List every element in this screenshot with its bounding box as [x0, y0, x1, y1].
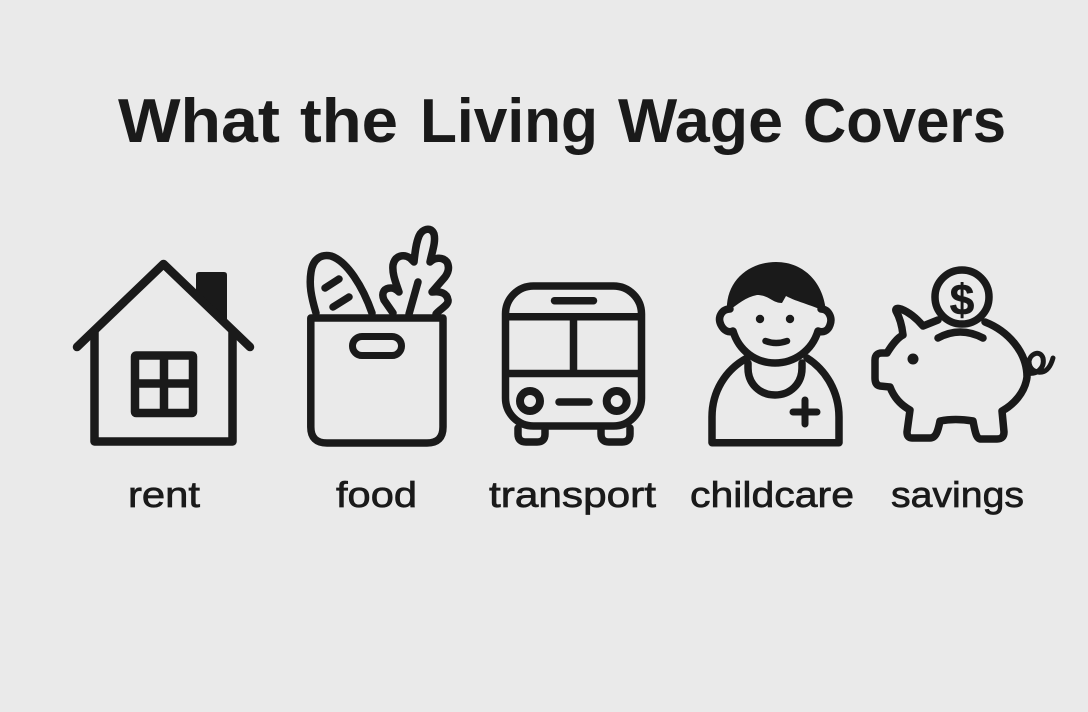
left eye	[756, 315, 764, 323]
plus badge	[793, 400, 817, 424]
label: rent: rent	[128, 474, 200, 515]
right eye	[786, 315, 794, 323]
right wheel	[601, 428, 630, 442]
title: the	[300, 87, 398, 156]
right headlight	[607, 391, 627, 411]
smile	[766, 341, 787, 343]
leaf stalk	[409, 282, 418, 314]
house walls	[94, 331, 232, 442]
leafy vegetable	[383, 229, 448, 314]
icon: piggy bank	[875, 270, 1053, 439]
bag handle	[352, 336, 402, 356]
label: food: food	[336, 474, 417, 515]
label: childcare: childcare	[690, 474, 854, 515]
title	[118, 87, 1006, 156]
face and ears	[720, 309, 831, 363]
bread	[310, 256, 372, 313]
left headlight	[520, 391, 540, 411]
icon: bus	[506, 286, 642, 442]
pig tail	[1027, 353, 1053, 373]
title: What	[118, 87, 280, 156]
hair	[727, 262, 826, 312]
pig eye	[908, 354, 918, 364]
dollar sign: $	[950, 276, 974, 325]
title: Living	[420, 87, 598, 156]
title: Wage	[618, 87, 783, 156]
coin slot	[938, 332, 983, 338]
label: transport: transport	[489, 474, 656, 515]
label: savings: savings	[891, 474, 1024, 515]
chimney	[196, 272, 227, 322]
bread slashes	[325, 279, 349, 307]
window	[135, 356, 193, 413]
icon: house	[77, 264, 250, 442]
destination sign	[554, 297, 594, 304]
bus windows	[506, 317, 641, 374]
bag body	[311, 318, 443, 443]
grille	[559, 398, 589, 406]
bus body	[506, 286, 642, 426]
icon: child	[712, 262, 839, 443]
title: Covers	[803, 87, 1006, 156]
body	[712, 358, 839, 443]
pig body	[875, 308, 1027, 439]
icon: grocery bag	[310, 229, 448, 443]
collar	[748, 363, 802, 395]
roof	[77, 264, 250, 347]
coin	[935, 270, 989, 324]
left wheel	[518, 428, 545, 442]
